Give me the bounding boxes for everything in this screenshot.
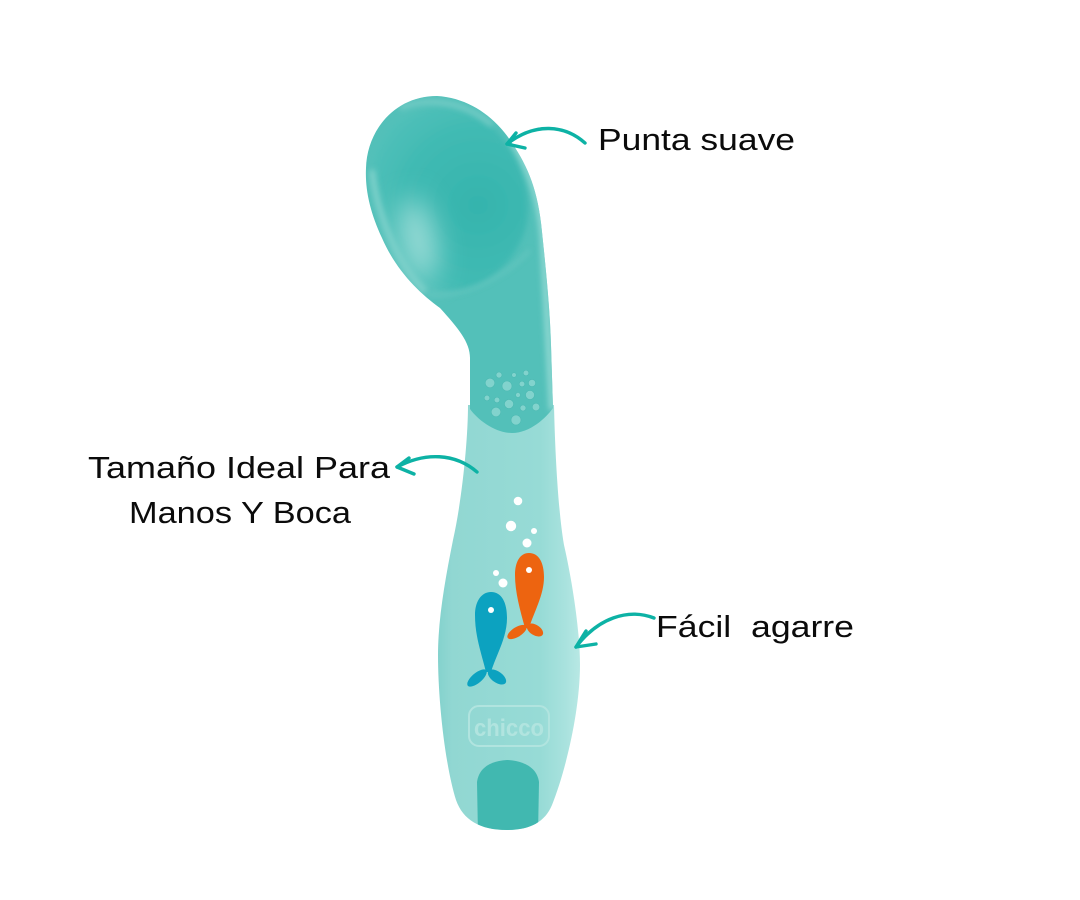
chicco logo: chicco	[474, 715, 544, 742]
arrow	[397, 457, 477, 474]
infographic: baby spoon with feature callouts	[88, 96, 852, 830]
label: Tamaño Ideal Para	[88, 450, 391, 485]
spoon silicone head	[360, 90, 560, 440]
icon: orange fish	[505, 553, 545, 642]
spoon handle	[438, 405, 580, 830]
callout: Punta suave	[507, 122, 795, 157]
icon: blue fish	[465, 592, 509, 690]
chicco logo	[469, 706, 549, 746]
bubbles	[493, 497, 537, 588]
handle end tab	[477, 760, 539, 835]
label: Fácil agarre	[656, 609, 854, 644]
callout: Fácil agarre	[576, 609, 854, 647]
arrow	[576, 614, 654, 647]
spoon	[360, 90, 580, 835]
callout: Tamaño ideal	[88, 450, 477, 530]
arrow	[507, 128, 585, 148]
label: Manos Y Boca	[129, 495, 352, 530]
label	[88, 450, 391, 530]
label: Punta suave	[598, 122, 795, 157]
texture bumps	[484, 370, 540, 425]
